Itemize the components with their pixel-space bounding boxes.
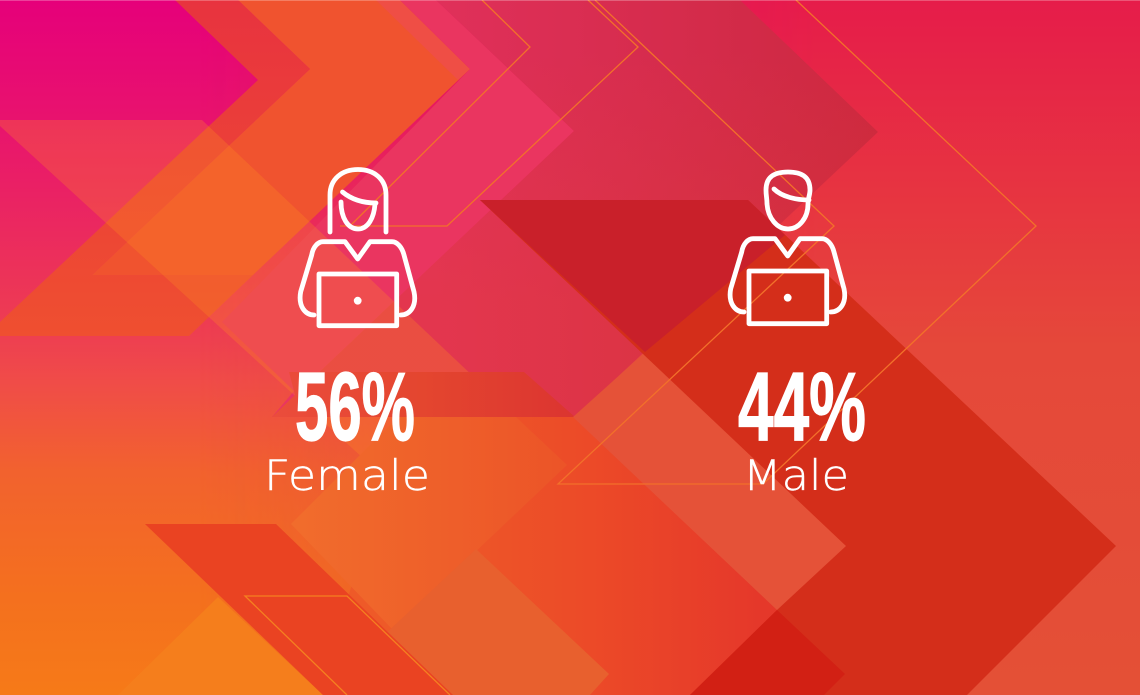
figure: 44%: 44% — [738, 352, 866, 461]
label: Female: Female — [264, 451, 430, 500]
female column — [264, 170, 430, 500]
figure: 56%: 56% — [295, 352, 415, 461]
male column — [730, 172, 866, 500]
icon: man at laptop — [730, 172, 845, 324]
label: Male: Male — [743, 451, 849, 500]
icon: woman at laptop — [300, 170, 415, 326]
